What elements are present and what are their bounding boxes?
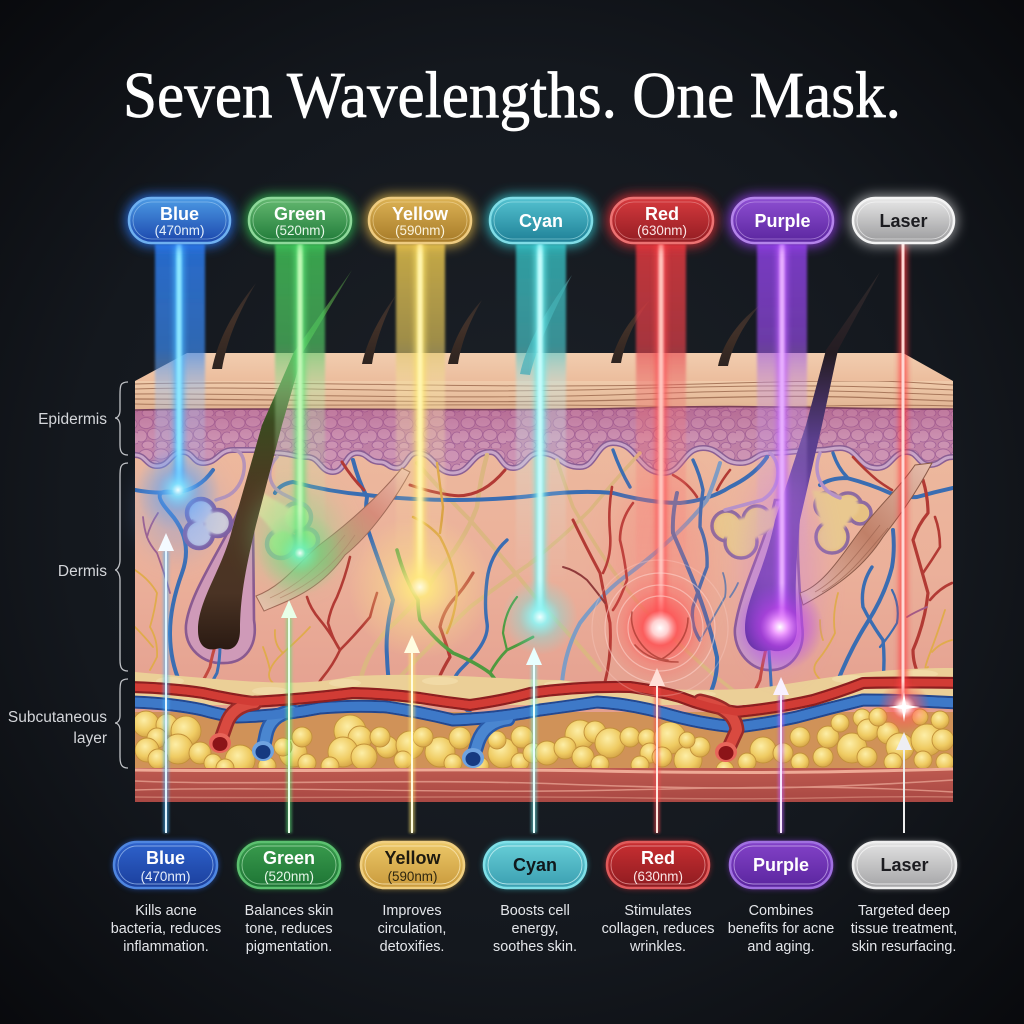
cut arteries bbox=[220, 701, 737, 752]
title: Seven Wavelengths. One Mask. bbox=[123, 59, 901, 132]
bottom wavelength pills and descriptions bbox=[111, 841, 957, 955]
left sebaceous gland bbox=[185, 499, 318, 558]
card: blue bbox=[111, 841, 221, 955]
small violet branches bbox=[143, 513, 927, 640]
card: red: wrinkles. bbox=[629, 939, 686, 955]
pill: green top: Green bbox=[274, 204, 326, 224]
card: green: (520nm) bbox=[264, 869, 314, 884]
right follicle sheath bbox=[735, 500, 803, 670]
card: yellow: Improves bbox=[382, 903, 442, 919]
pill: cyan top: Cyan bbox=[519, 211, 563, 231]
yellow beam bbox=[348, 244, 492, 659]
card: yellow: (590nm) bbox=[388, 869, 437, 884]
card: purple: Combines bbox=[749, 903, 813, 919]
card: red bbox=[602, 841, 714, 955]
pill: green top bbox=[246, 195, 354, 246]
follicle duct outlines bbox=[216, 450, 305, 505]
gold nerves bbox=[135, 463, 952, 683]
green nerve bbox=[397, 550, 533, 693]
pill: red top bbox=[608, 195, 716, 246]
layer labels bbox=[8, 382, 128, 768]
pill: green top: (520nm) bbox=[275, 223, 325, 238]
card: red: Red bbox=[641, 848, 675, 868]
label: subcutaneous layer bbox=[8, 679, 128, 768]
label: subcutaneous layer: Subcutaneous bbox=[8, 709, 107, 726]
blue branches bbox=[135, 450, 953, 717]
card: green: Balances skin bbox=[245, 903, 333, 919]
card: blue: Blue bbox=[146, 848, 185, 868]
pill: blue top: (470nm) bbox=[155, 223, 204, 238]
epidermis upper boundary bbox=[135, 407, 953, 410]
card: laser: skin resurfacing. bbox=[852, 939, 956, 955]
arrow: laser bbox=[896, 732, 912, 833]
arrow: red bbox=[649, 668, 665, 833]
blue beam bbox=[136, 244, 220, 555]
gland interior bbox=[715, 490, 859, 555]
arrow: cyan bbox=[526, 647, 542, 833]
fat cells bbox=[135, 708, 953, 768]
card: yellow: detoxifies. bbox=[380, 939, 444, 955]
card: laser: tissue treatment, bbox=[851, 921, 957, 937]
card: green: Green bbox=[263, 848, 315, 868]
skin top surface bbox=[135, 353, 953, 381]
upward arrows bbox=[158, 533, 912, 833]
pill: purple top bbox=[729, 195, 836, 246]
card: cyan: soothes skin. bbox=[493, 939, 577, 955]
label: epidermis bbox=[38, 382, 128, 455]
card: cyan bbox=[483, 841, 587, 955]
left follicle sheath bbox=[186, 500, 255, 663]
card: purple bbox=[728, 841, 834, 955]
fat layer base bbox=[135, 712, 953, 772]
label: epidermis: Epidermis bbox=[38, 411, 107, 428]
laser beam bbox=[878, 244, 930, 733]
card: purple: benefits for acne bbox=[728, 921, 834, 937]
card: cyan: Cyan bbox=[513, 855, 557, 875]
arrow: blue bbox=[158, 533, 174, 833]
vessel openings bbox=[209, 733, 737, 768]
main artery bbox=[130, 682, 958, 712]
vein highlight overlap bbox=[130, 700, 958, 727]
pill: laser top bbox=[850, 195, 957, 246]
card: green bbox=[237, 841, 341, 955]
card: purple: and aging. bbox=[747, 939, 815, 955]
basement membrane bbox=[135, 443, 953, 473]
red beam bbox=[592, 244, 728, 696]
card: cyan: energy, bbox=[512, 921, 558, 937]
artery highlight overlap bbox=[130, 682, 958, 712]
left hair shaft bbox=[198, 270, 352, 649]
pill: yellow top: (590nm) bbox=[395, 223, 445, 238]
pill: cyan top bbox=[487, 195, 595, 246]
card: blue: Kills acne bbox=[135, 903, 197, 919]
cyan beam bbox=[502, 244, 578, 655]
card: blue: bacteria, reduces bbox=[111, 921, 221, 937]
pill: blue top: Blue bbox=[160, 204, 199, 224]
right bulb papilla bbox=[743, 645, 772, 707]
right arrector muscle bbox=[800, 463, 932, 605]
card: blue: inflammation. bbox=[123, 939, 209, 955]
card: laser bbox=[851, 841, 957, 955]
cut veins bbox=[263, 711, 508, 758]
label: dermis: Dermis bbox=[58, 563, 107, 580]
card: laser: Targeted deep bbox=[858, 903, 950, 919]
stratum corneum lines bbox=[135, 381, 953, 409]
card: red: collagen, reduces bbox=[602, 921, 714, 937]
left bulb papilla bbox=[202, 648, 222, 679]
right duct outlines bbox=[725, 453, 840, 510]
collagen fibres bbox=[360, 453, 737, 693]
card: yellow bbox=[360, 841, 465, 955]
card: red: Stimulates bbox=[624, 903, 692, 919]
card: red: (630nm) bbox=[633, 869, 683, 884]
main vessels bbox=[130, 682, 958, 758]
muscle layer bbox=[135, 768, 953, 802]
epidermis cell layer bbox=[135, 407, 953, 473]
right hair follicle bbox=[712, 453, 871, 707]
arrow: yellow bbox=[404, 635, 420, 833]
green beam bbox=[254, 244, 342, 595]
card: laser: Laser bbox=[880, 855, 929, 875]
red branches bbox=[307, 457, 952, 697]
pill: red top: (630nm) bbox=[637, 223, 687, 238]
skin front face bbox=[135, 381, 953, 802]
pill: blue top bbox=[126, 195, 233, 246]
pill: yellow top: Yellow bbox=[392, 204, 449, 224]
light beams bbox=[136, 244, 930, 733]
left hair follicle bbox=[185, 450, 318, 702]
card: cyan: Boosts cell bbox=[500, 903, 570, 919]
skin cross-section bbox=[130, 270, 958, 802]
label: dermis bbox=[58, 463, 128, 671]
pill: laser top: Laser bbox=[879, 211, 928, 231]
arrow: green bbox=[281, 600, 297, 833]
small hairs bbox=[212, 275, 760, 375]
right sebaceous glands bbox=[712, 492, 871, 558]
card: green: pigmentation. bbox=[246, 939, 332, 955]
blood vessels and nerves bbox=[135, 450, 953, 717]
top wavelength pills bbox=[126, 195, 957, 246]
subcutaneous fat band bbox=[135, 668, 953, 705]
card: yellow: circulation, bbox=[378, 921, 446, 937]
pill: purple top: Purple bbox=[754, 211, 811, 231]
arrow: purple bbox=[773, 677, 789, 833]
left arrector muscle bbox=[256, 468, 410, 611]
pill: red top: Red bbox=[645, 204, 679, 224]
card: blue: (470nm) bbox=[141, 869, 190, 884]
right hair shaft bbox=[745, 272, 880, 651]
main vein bbox=[130, 700, 958, 727]
card: green: tone, reduces bbox=[245, 921, 333, 937]
label: subcutaneous layer: layer bbox=[73, 730, 107, 747]
epidermis pink shading bbox=[135, 408, 953, 438]
card: purple: Purple bbox=[753, 855, 809, 875]
card: yellow: Yellow bbox=[384, 848, 442, 868]
pill: yellow top bbox=[366, 195, 474, 246]
gland fill bbox=[186, 493, 310, 546]
purple beam bbox=[736, 244, 824, 671]
